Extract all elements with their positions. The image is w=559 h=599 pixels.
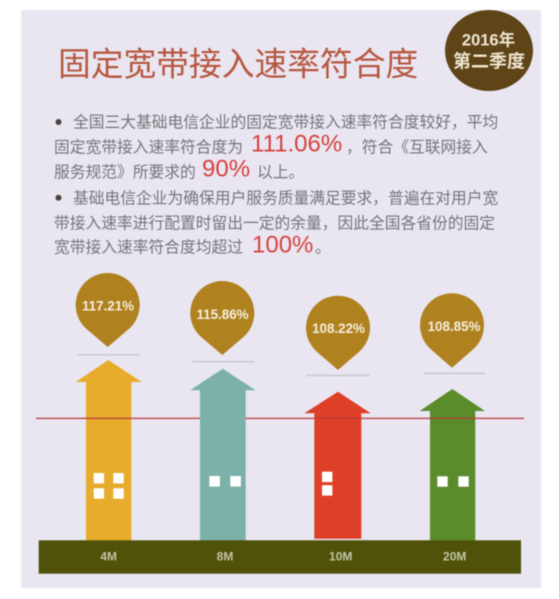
text block: second bullet: 带接入速率进行配置时留出一定的余量，因此全国各省份的固定 [54,213,495,232]
text block: first bullet: 固定宽带接入速率符合度为 [54,138,243,156]
base band with speed labels [39,540,521,574]
pin: 108.22% [306,296,370,370]
text block: first bullet: 111.06% [251,130,342,158]
text block: second bullet: 宽带接入速率符合度均超过 [54,238,243,256]
text block: second bullet [54,189,498,258]
divider under pin 1 [78,354,139,356]
pin: 108.85% [420,293,484,368]
base band with speed labels: 10M [329,550,352,564]
text block: first bullet: 服务规范》所要求的 [54,163,196,181]
text block: first bullet: 全国三大基础电信企业的固定宽带接入速率符合度较好，平均 [73,113,498,131]
arrow: 10M [304,392,371,539]
divider under pin 2 [192,361,254,363]
text block: first bullet: ，符合《互联网接入 [346,138,488,156]
pin: 117.21% [76,273,140,347]
divider under pin 4 [423,373,485,374]
pin: 117.21%: 117.21% [82,298,134,313]
base band with speed labels: 8M [217,550,233,564]
pin: 115.86%: 115.86% [196,307,249,322]
badge: 2016 second quarter: 2016年 [462,30,515,50]
reference line [36,418,524,419]
text block: first bullet [54,113,498,182]
text block: second bullet: 基础电信企业为确保用户服务质量满足要求，普遍在对用户宽 [73,189,498,207]
pin: 108.22%: 108.22% [312,321,365,336]
badge: 2016 second quarter: 第二季度 [453,50,525,72]
text block: second bullet: 。 [315,239,331,256]
text block: first bullet: 以上。 [257,163,304,181]
pin: 115.86% [190,281,254,355]
pin: 108.85%: 108.85% [428,319,481,334]
text block: second bullet: 100% [252,232,313,258]
base band with speed labels: 4M [100,550,117,564]
title: 固定宽带接入速率符合度 [58,45,418,82]
badge: 2016 second quarter [445,10,533,91]
text block: first bullet: 90% [202,156,250,182]
base band with speed labels: 20M [443,550,466,564]
arrow: 20M [420,389,485,540]
divider under pin 3 [307,375,369,376]
arrow: 4M [76,360,142,540]
arrow: 8M [190,369,256,540]
